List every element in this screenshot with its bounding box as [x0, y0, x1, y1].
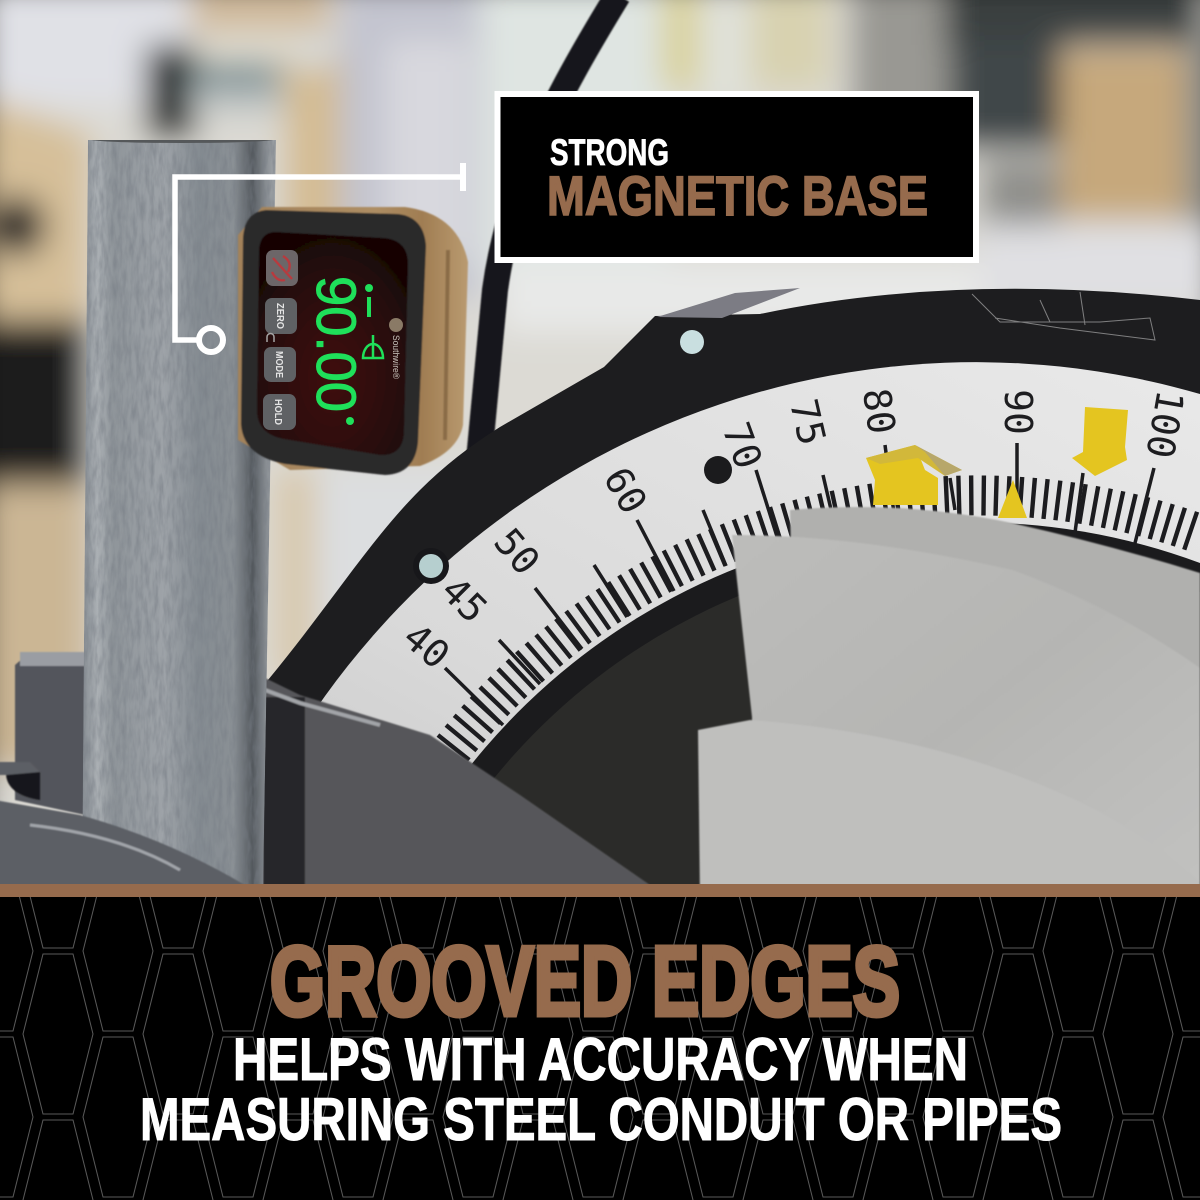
black dot mark: [704, 456, 732, 484]
brown rule: [0, 884, 1200, 897]
casting lower layer: [698, 720, 1200, 900]
yellow triangle marker: [998, 480, 1027, 518]
scale numbers: 75: [781, 395, 834, 449]
indicator: [365, 284, 373, 317]
button: alarm off: [266, 250, 298, 286]
black ring: [268, 289, 1200, 900]
scale numbers: [395, 385, 1192, 678]
inner black rim: [388, 522, 1200, 900]
scale numbers: 70: [714, 417, 771, 475]
button: hold: [263, 394, 296, 430]
magnet glyph: [267, 334, 274, 342]
screw left: [413, 548, 449, 584]
machine base lower left: [0, 762, 250, 888]
grey casting: [698, 507, 1200, 900]
callout line one: STRONG: [550, 132, 669, 173]
angle readout: 90.00: [305, 276, 368, 412]
major ticks: [445, 443, 1154, 725]
casting front layer: [732, 535, 1200, 900]
callout line two: MAGNETIC BASE: [547, 164, 928, 227]
gauge buttons: [263, 250, 298, 430]
body line one: HELPS WITH ACCURACY WHEN: [233, 1026, 968, 1093]
protractor scale: [219, 288, 1200, 900]
ring top facet: [657, 288, 800, 318]
gauge brand: [389, 318, 403, 379]
bottom banner: [0, 884, 1200, 1200]
scale numbers: 45: [432, 568, 496, 632]
level glyph: [363, 335, 383, 358]
casting rear layer: [790, 507, 1200, 900]
yellow house marker: [866, 445, 962, 505]
machine base upright left: [15, 652, 85, 815]
black panel with hexagon pattern: [0, 897, 1200, 1200]
blurred workshop background: [0, 0, 1200, 900]
heading: GROOVED EDGES: [270, 926, 900, 1036]
button: zero: ZERO: [274, 303, 285, 329]
dark disc: [417, 549, 1200, 900]
yellow arrow marker: [1072, 407, 1128, 476]
tan housing: [238, 207, 468, 470]
button: hold: HOLD: [272, 399, 283, 425]
scale numbers: 100: [1137, 387, 1192, 462]
callout: strong magnetic base: [498, 94, 976, 260]
minor ticks: [430, 495, 1200, 779]
digital angle gauge: [238, 207, 468, 475]
steel pipe: [82, 140, 276, 884]
cable: [478, 0, 618, 470]
machine base right: [263, 677, 650, 900]
scale numbers: 40: [395, 614, 458, 678]
display screen: [257, 232, 408, 455]
white scale band: [219, 362, 1200, 900]
leader line from callout to pipe: [175, 163, 465, 352]
scale numbers: 80: [854, 385, 904, 437]
scale numbers: 50: [485, 520, 549, 583]
gauge brand: Southwire®: [391, 335, 401, 379]
button: zero: [265, 298, 297, 334]
button: mode: MODE: [273, 351, 284, 378]
black bezel: [241, 210, 426, 475]
scale numbers: 60: [595, 460, 656, 521]
button: mode: [264, 347, 296, 382]
screw top: [680, 330, 704, 354]
groove: [445, 250, 448, 440]
scale numbers: 90: [996, 389, 1040, 435]
ring scratches: [972, 292, 1155, 340]
